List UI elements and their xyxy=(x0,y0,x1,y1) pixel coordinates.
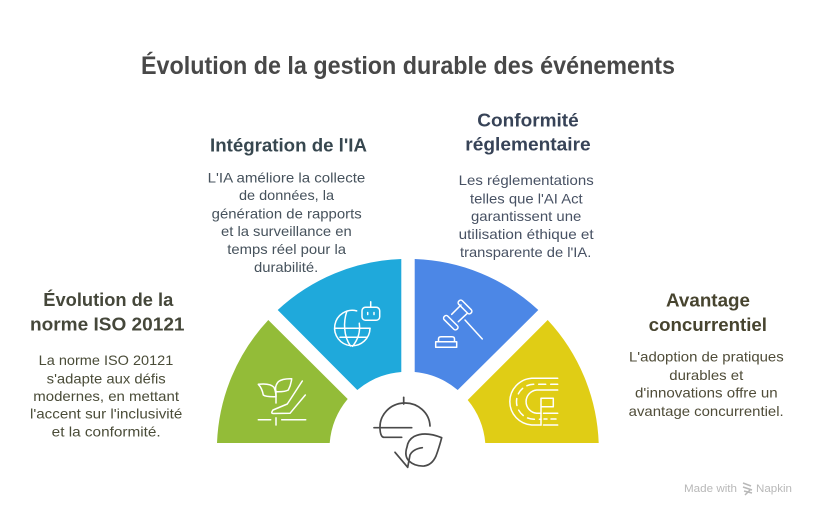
text block: réglementations: utilisation éthique et xyxy=(459,226,594,242)
title: Évolution de la gestion durable des événements xyxy=(141,51,675,80)
text block: réglementations: transparente de l'IA. xyxy=(460,244,591,260)
branding: Made with Napkin: Made with xyxy=(684,483,737,495)
segment: blue xyxy=(278,259,401,390)
text block: IA: et la surveillance en xyxy=(221,223,352,239)
text block: norme ISO: modernes, en mettant xyxy=(33,388,179,404)
text block: réglementations: garantissent une xyxy=(471,208,582,224)
text block: IA xyxy=(208,169,366,275)
text block: IA: durabilité. xyxy=(254,259,318,275)
heading: Conformité réglementaire: Conformité xyxy=(477,111,579,131)
text block: norme ISO: La norme ISO 20121 xyxy=(39,352,174,368)
text block: IA: génération de rapports xyxy=(212,205,362,221)
text block: avantage: avantage concurrentiel. xyxy=(629,403,784,419)
heading: Avantage concurrentiel: concurrentiel xyxy=(649,315,767,335)
segment: yellow xyxy=(468,320,599,443)
heading: Conformité réglementaire xyxy=(465,111,591,155)
segment: green xyxy=(217,320,348,443)
branding: Made with Napkin xyxy=(684,483,792,495)
text block: IA: L'IA améliore la collecte xyxy=(208,169,366,185)
heading: Intégration de l'IA: Intégration de l'IA xyxy=(210,136,367,156)
icon: napkin logo xyxy=(743,483,752,495)
icon: globe with robot xyxy=(335,302,380,346)
text block: réglementations: Les réglementations xyxy=(459,172,594,188)
segment: periwinkle blue xyxy=(415,259,538,390)
panel: Évolution de la norme ISO 20121 text xyxy=(30,289,184,440)
text block: IA: de données, la xyxy=(239,187,334,203)
icon: center dome and leaf xyxy=(374,397,442,467)
panel: Conformité réglementaire text xyxy=(459,111,594,260)
text block: IA: temps réel pour la xyxy=(227,241,346,257)
heading: Évolution de la norme ISO 20121: norme ISO 20121 xyxy=(30,315,184,335)
text block: réglementations: telles que l'AI Act xyxy=(470,190,583,206)
heading: Évolution de la norme ISO 20121 xyxy=(30,289,184,335)
text block: norme ISO: l'accent sur l'inclusivité xyxy=(30,406,183,422)
icon: plant in hand xyxy=(258,379,306,425)
text block: norme ISO xyxy=(30,352,183,440)
text block: norme ISO: s'adapte aux défis xyxy=(47,370,166,386)
icon: race track with flag xyxy=(510,378,558,425)
panel: Avantage concurrentiel text xyxy=(629,291,784,419)
text block: avantage xyxy=(629,349,784,419)
panel: Intégration de l'IA text xyxy=(208,136,367,275)
heading: Avantage concurrentiel xyxy=(649,291,767,335)
text block: réglementations xyxy=(459,172,594,260)
heading: Conformité réglementaire: réglementaire xyxy=(465,135,591,155)
heading: Évolution de la norme ISO 20121: Évolution de la xyxy=(43,289,174,310)
text block: avantage: d'innovations offre un xyxy=(635,385,778,401)
text block: avantage: L'adoption de pratiques xyxy=(629,349,784,365)
icon: gavel xyxy=(436,299,482,347)
heading: Avantage concurrentiel: Avantage xyxy=(666,291,750,311)
text block: avantage: durables et xyxy=(669,367,743,383)
branding: Made with Napkin: Napkin xyxy=(756,483,792,495)
text block: norme ISO: et la conformité. xyxy=(52,424,161,440)
